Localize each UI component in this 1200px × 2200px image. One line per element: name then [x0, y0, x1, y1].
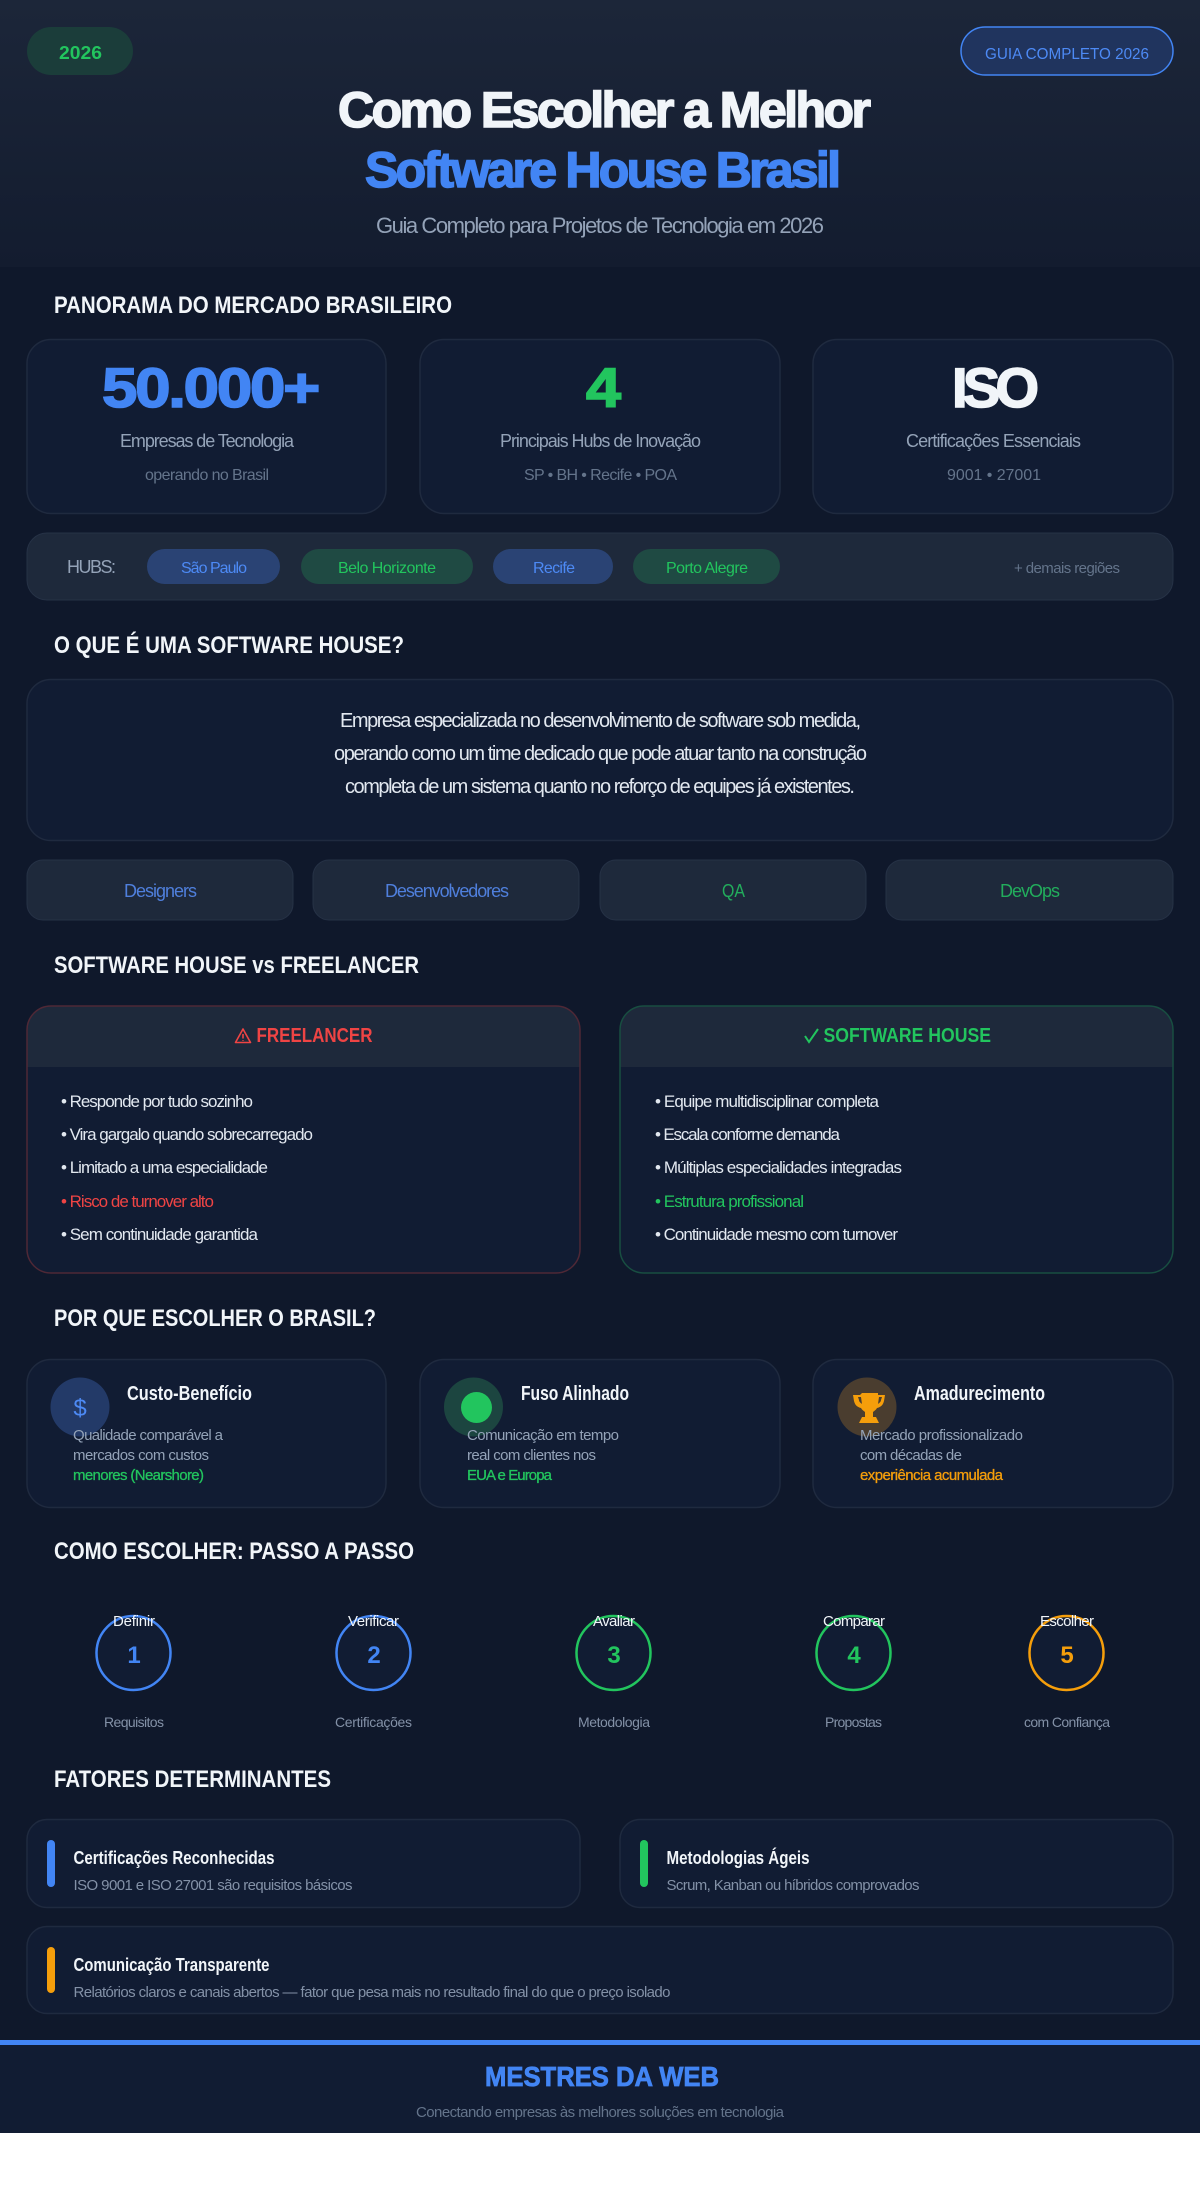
- factor: certificações: Certificações Reconhecidas: [74, 1848, 274, 1868]
- pill: Belo Horizonte: Belo Horizonte: [338, 560, 436, 577]
- title: Software House Brasil: [365, 142, 841, 198]
- step 1: Definir: [113, 1613, 155, 1630]
- panel: freelancer: • Limitado a uma especialidade: [61, 1158, 268, 1177]
- pill: São Paulo: [147, 549, 280, 584]
- step 5: [1024, 1613, 1110, 1730]
- panel: stat iso: Certificações Essenciais: [906, 431, 1081, 451]
- step 1: [96, 1613, 170, 1730]
- factor: metodologias: Scrum, Kanban ou híbridos comprovados: [666, 1877, 920, 1894]
- panel: software house: SOFTWARE HOUSE: [824, 1025, 991, 1047]
- panel: stat hubs: [420, 340, 780, 514]
- panel: freelancer: • Responde por tudo sozinho: [61, 1092, 253, 1111]
- role card: QA: [600, 860, 866, 920]
- panel: stat empresas: Empresas de Tecnologia: [120, 431, 295, 451]
- icon: check: [805, 1029, 818, 1042]
- factor: certificações: [27, 1820, 580, 1908]
- footer: MESTRES DA WEB: [485, 2061, 719, 2092]
- pill: Recife: Recife: [533, 560, 575, 577]
- role card: QA: QA: [722, 881, 745, 901]
- note: demais regiões: + demais regiões: [1014, 560, 1120, 577]
- panel: amadurecimento: Amadurecimento: [914, 1383, 1045, 1405]
- factor: metodologias: [620, 1820, 1173, 1908]
- badge: guia completo: [961, 27, 1173, 75]
- factor: certificações: ISO 9001 e ISO 27001 são requisitos básicos: [74, 1877, 352, 1894]
- icon: dollar: [50, 1378, 110, 1436]
- panel: stat empresas: [27, 340, 386, 514]
- panel: amadurecimento: [813, 1360, 1173, 1508]
- role card: Desenvolvedores: Desenvolvedores: [385, 881, 509, 901]
- panel: stat iso: 9001 • 27001: [947, 467, 1041, 484]
- panel: software house: • Equipe multidisciplinar completa: [655, 1092, 880, 1111]
- step 2: 2: [367, 1642, 381, 1669]
- panel: software house: • Estrutura profissional: [655, 1192, 804, 1211]
- panel: stat iso: ISO: [952, 356, 1039, 419]
- panel: amadurecimento: experiência acumulada: [860, 1467, 1004, 1484]
- panel: software house: • Múltiplas especialidades integradas: [655, 1158, 902, 1177]
- subtitle: Guia Completo para Projetos de Tecnologia em 2026: [376, 213, 824, 238]
- step 1: Requisitos: [104, 1714, 164, 1730]
- header: [0, 0, 1200, 267]
- panel: stat hubs: 4: [586, 356, 621, 419]
- section heading: definição: O QUE É UMA SOFTWARE HOUSE?: [54, 631, 404, 659]
- panel: stat hubs: SP • BH • Recife • POA: [524, 467, 677, 484]
- step 3: [576, 1613, 650, 1730]
- panel: fuso alinhado: EUA e Europa: [467, 1467, 553, 1484]
- panel: custo-benefício: Qualidade comparável a: [73, 1427, 224, 1444]
- panel: fuso alinhado: [420, 1360, 780, 1508]
- step 5: com Confiança: [1024, 1714, 1110, 1730]
- panel: custo-benefício: menores (Nearshore): [73, 1467, 204, 1484]
- panel: hubs bar: [27, 533, 1173, 600]
- icon: trophy: [838, 1378, 896, 1436]
- role card: Designers: Designers: [124, 881, 197, 901]
- panel: definição: Empresa especializada no desenvolvimento de software sob medida,: [340, 710, 861, 732]
- panel: amadurecimento: com décadas de: [860, 1447, 962, 1464]
- icon: warning: [236, 1029, 250, 1042]
- step 5: Escolher: [1040, 1613, 1094, 1630]
- role card: Desenvolvedores: [313, 860, 579, 920]
- step 4: 4: [847, 1642, 861, 1669]
- panel: fuso alinhado: Comunicação em tempo: [467, 1427, 619, 1444]
- step 5: 5: [1060, 1642, 1074, 1669]
- panel: custo-benefício: mercados com custos: [73, 1447, 209, 1464]
- step 4: Comparar: [823, 1613, 885, 1630]
- factor: comunicação: Relatórios claros e canais abertos — fator que pesa mais no resultado final do que o preço isolado: [74, 1984, 670, 2001]
- panel: freelancer: • Sem continuidade garantida: [61, 1225, 259, 1244]
- footer: Conectando empresas às melhores soluções em tecnologia: [416, 2104, 785, 2121]
- step 3: 3: [607, 1642, 621, 1669]
- icon: globe dot: [444, 1378, 503, 1436]
- panel: custo-benefício: [27, 1360, 386, 1508]
- pill: Recife: [493, 549, 613, 584]
- step 3: Avaliar: [593, 1613, 635, 1630]
- pill: Porto Alegre: [633, 549, 780, 584]
- factor: metodologias: Metodologias Ágeis: [666, 1847, 810, 1868]
- panel: fuso alinhado: real com clientes nos: [467, 1447, 596, 1464]
- step 2: Certificações: [335, 1714, 412, 1730]
- panel: software house: • Continuidade mesmo com turnover: [655, 1225, 898, 1244]
- section heading: comparativo: SOFTWARE HOUSE vs FREELANCER: [54, 952, 419, 979]
- panel: freelancer: FREELANCER: [256, 1025, 373, 1047]
- panel: software house: [620, 1006, 1173, 1273]
- panel: stat iso: [813, 340, 1173, 514]
- pill: São Paulo: São Paulo: [181, 560, 247, 577]
- step 2: Verificar: [348, 1613, 399, 1630]
- footer: [0, 2040, 1200, 2133]
- panel: definição: completa de um sistema quanto no reforço de equipes já existentes.: [345, 776, 855, 798]
- role card: Designers: [27, 860, 293, 920]
- step 1: 1: [127, 1642, 141, 1669]
- icon: dollar: $: [73, 1395, 87, 1422]
- panel: stat empresas: 50.000+: [102, 356, 318, 419]
- badge: 2026: [27, 27, 133, 75]
- panel: hubs bar: HUBS:: [67, 557, 116, 577]
- panel: stat empresas: operando no Brasil: [145, 467, 269, 484]
- title: Como Escolher a Melhor: [338, 82, 871, 138]
- factor: comunicação: Comunicação Transparente: [74, 1955, 270, 1975]
- badge: 2026: 2026: [59, 43, 102, 63]
- factor: comunicação: [27, 1926, 1173, 2014]
- step 3: Metodologia: [578, 1714, 650, 1730]
- panel: definição: operando como um time dedicado que pode atuar tanto na construção: [334, 743, 867, 765]
- section heading: panorama: PANORAMA DO MERCADO BRASILEIRO: [54, 292, 452, 319]
- panel: freelancer: • Vira gargalo quando sobrecarregado: [61, 1125, 313, 1144]
- section heading: fatores: FATORES DETERMINANTES: [54, 1766, 331, 1793]
- role card: DevOps: DevOps: [1000, 881, 1060, 901]
- section heading: brasil: POR QUE ESCOLHER O BRASIL?: [54, 1305, 376, 1332]
- panel: definição: [27, 680, 1173, 840]
- title: [338, 82, 871, 198]
- step 4: Propostas: [825, 1714, 882, 1730]
- panel: fuso alinhado: Fuso Alinhado: [521, 1383, 629, 1405]
- step 4: [816, 1613, 890, 1730]
- badge: guia completo: GUIA COMPLETO 2026: [985, 46, 1149, 63]
- role card: DevOps: [886, 860, 1173, 920]
- pill: Porto Alegre: Porto Alegre: [666, 560, 748, 577]
- panel: freelancer: [27, 1006, 580, 1273]
- panel: software house: • Escala conforme demanda: [655, 1125, 841, 1144]
- panel: custo-benefício: Custo-Benefício: [127, 1383, 252, 1405]
- section heading: passo a passo: COMO ESCOLHER: PASSO A PASSO: [54, 1538, 414, 1565]
- panel: amadurecimento: Mercado profissionalizado: [860, 1427, 1023, 1444]
- pill: Belo Horizonte: [301, 549, 473, 584]
- step 2: [335, 1613, 412, 1730]
- panel: freelancer: • Risco de turnover alto: [61, 1192, 214, 1211]
- panel: stat hubs: Principais Hubs de Inovação: [500, 431, 701, 451]
